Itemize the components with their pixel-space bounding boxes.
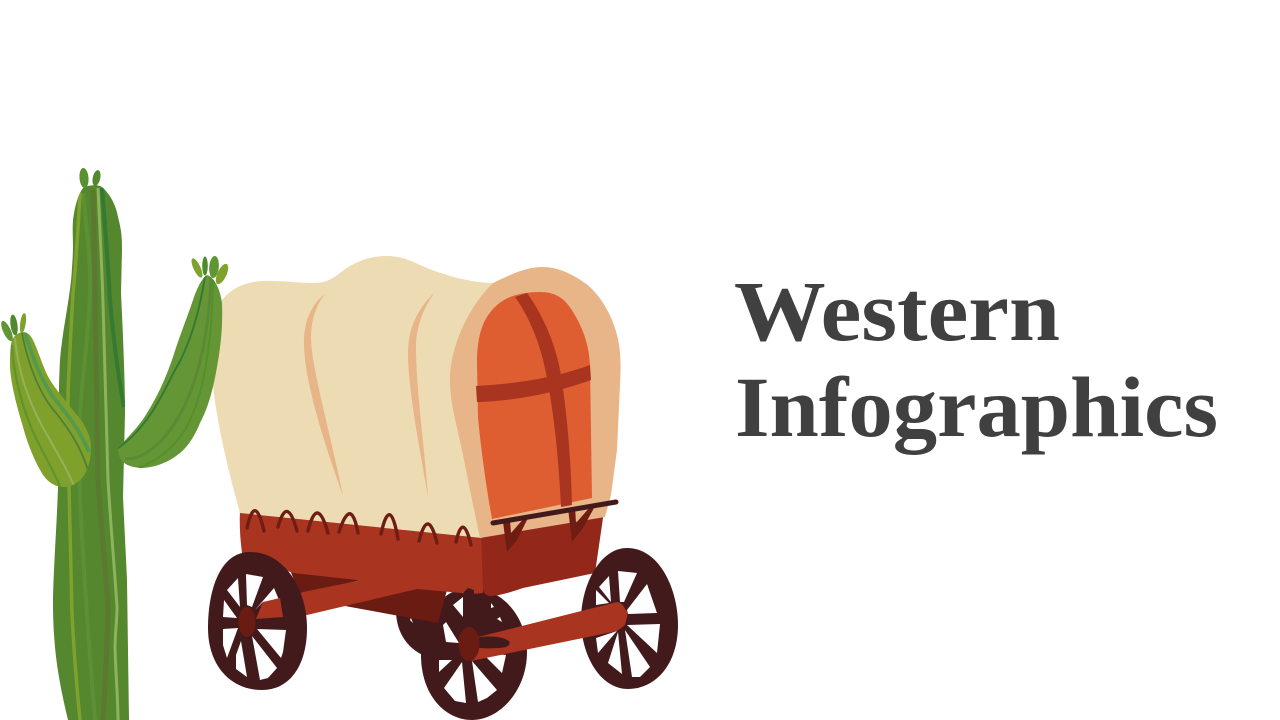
seat bracket left: [503, 517, 528, 552]
cactus trunk: [53, 185, 129, 720]
wagon body rear: [481, 510, 604, 596]
wheel left: [208, 552, 307, 690]
canvas fold left: [304, 294, 343, 496]
wagon underbody shadow: [345, 584, 447, 623]
left arm: [10, 332, 91, 487]
hub front centre: [458, 627, 480, 661]
seat bar: [493, 502, 616, 523]
slide canvas: [1, 168, 1216, 720]
spoke over axle: [479, 636, 510, 648]
right arm buds: [189, 256, 231, 286]
window cross vertical: [515, 293, 572, 507]
dark triangle under body: [288, 565, 420, 595]
title line 2: Infographics: [735, 359, 1218, 455]
window cross horizontal: [476, 365, 591, 402]
title line 1: Western: [734, 263, 1060, 359]
seat bracket right: [568, 507, 594, 542]
wagon body side: [240, 511, 483, 594]
canvas lacing: [247, 511, 471, 545]
wheels centre: rear and front wheel silhouette: [396, 588, 527, 720]
trunk stripes: [68, 188, 124, 720]
rear window opening: [477, 292, 592, 519]
wagon axle left: [252, 570, 420, 628]
left arm buds: [0, 313, 27, 343]
top buds: [79, 168, 102, 188]
right arm stripes: [118, 276, 213, 468]
canvas fold right: [408, 292, 435, 497]
canvas hood rim: [450, 267, 621, 538]
canvas cover: [211, 256, 500, 538]
title: [734, 263, 1218, 455]
illustration: cactus: [0, 168, 231, 720]
right arm: [118, 275, 222, 468]
left arm stripes: [12, 333, 89, 486]
wagon axle right: [471, 602, 628, 661]
illustration: covered wagon: [208, 256, 678, 720]
wheel right: [581, 548, 678, 689]
spoke over body: [464, 588, 474, 620]
